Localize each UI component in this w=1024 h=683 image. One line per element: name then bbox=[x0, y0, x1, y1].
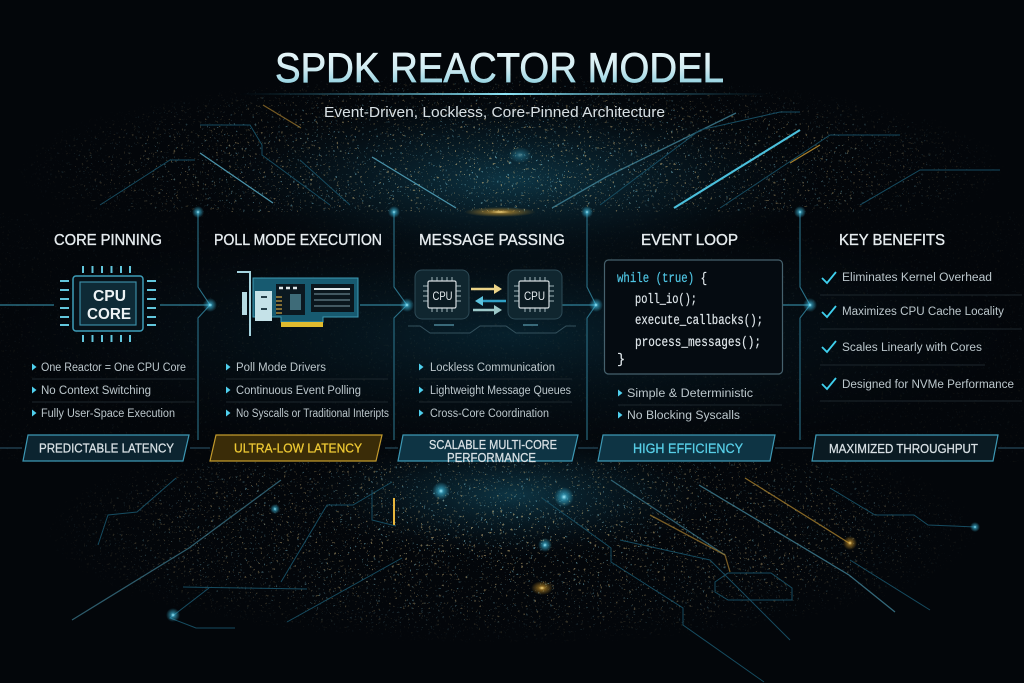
icon: network adapter card bbox=[237, 272, 358, 336]
bullet list: message passing: Cross-Core Coordination bbox=[430, 408, 549, 420]
panel: event loop bbox=[598, 232, 782, 461]
badge: high efficiency: HIGH EFFICIENCY bbox=[633, 441, 743, 456]
icon: CPU core chip: CORE bbox=[87, 306, 131, 323]
badge: ultra-low latency: ULTRA-LOW LATENCY bbox=[234, 442, 363, 456]
badge: ultra-low latency bbox=[210, 435, 382, 461]
bullet list: event loop bbox=[618, 388, 782, 422]
bullet list: poll mode execution bbox=[226, 362, 389, 420]
badge: maximized throughput bbox=[812, 435, 998, 461]
code block: event loop: } bbox=[617, 353, 625, 368]
panel: key benefits bbox=[812, 232, 1022, 461]
bullet list: message passing bbox=[419, 362, 572, 420]
badge: scalable multi-core performance: PERFORMANCE bbox=[447, 451, 536, 465]
heading: poll mode execution: POLL MODE EXECUTION bbox=[214, 232, 382, 249]
heading: message passing: MESSAGE PASSING bbox=[419, 232, 565, 249]
bullet list: message passing: Lightweight Message Queues bbox=[430, 385, 571, 397]
checklist: key benefits: Scales Linearly with Cores bbox=[842, 342, 982, 354]
icon: CPU core chip: CPU bbox=[93, 288, 126, 305]
subtitle: Event-Driven, Lockless, Core-Pinned Architecture bbox=[324, 104, 665, 121]
icon: CPU core chip bbox=[60, 266, 156, 342]
bullet list: poll mode execution: No Syscalls or Traditional Interipts bbox=[236, 408, 389, 420]
badge: predictable latency bbox=[23, 435, 189, 461]
code block: event loop: while (true) { bbox=[617, 272, 707, 287]
badge: high efficiency bbox=[598, 435, 775, 461]
bullet list: core pinning: One Reactor = One CPU Core bbox=[41, 362, 186, 374]
bullet list: core pinning: Fully User-Space Execution bbox=[41, 408, 175, 420]
panel: core pinning bbox=[23, 232, 195, 461]
bullet list: message passing: Lockless Communication bbox=[430, 362, 555, 374]
bullet list: core pinning bbox=[32, 362, 195, 420]
checklist: key benefits bbox=[820, 272, 1022, 401]
code block: event loop: poll_io(); bbox=[635, 293, 697, 308]
badge: maximized throughput: MAXIMIZED THROUGHPUT bbox=[829, 442, 978, 456]
panel: poll mode execution bbox=[210, 232, 389, 461]
code block: event loop bbox=[604, 260, 782, 374]
code block: event loop: process_messages(); bbox=[635, 336, 761, 351]
bullet list: core pinning: No Context Switching bbox=[41, 385, 151, 397]
badge: predictable latency: PREDICTABLE LATENCY bbox=[39, 442, 175, 456]
heading: event loop: EVENT LOOP bbox=[641, 232, 738, 249]
title: SPDK REACTOR MODEL bbox=[275, 44, 724, 91]
checklist: key benefits: Eliminates Kernel Overhead bbox=[842, 272, 992, 284]
title underline rule bbox=[240, 93, 770, 95]
checklist: key benefits: Designed for NVMe Performance bbox=[842, 379, 1014, 391]
heading: key benefits: KEY BENEFITS bbox=[839, 232, 945, 249]
code block: event loop: execute_callbacks(); bbox=[635, 314, 763, 329]
heading: core pinning: CORE PINNING bbox=[54, 232, 162, 249]
bullet list: event loop: Simple & Deterministic bbox=[627, 388, 753, 400]
badge: scalable multi-core performance: SCALABLE MULTI-CORE bbox=[429, 438, 557, 452]
panel: message passing bbox=[398, 232, 578, 465]
diagram: CPU to CPU message exchange: CPU bbox=[432, 289, 452, 303]
badge: scalable multi-core performance bbox=[398, 435, 578, 465]
checklist: key benefits: Maximizes CPU Cache Locality bbox=[842, 306, 1004, 318]
bullet list: poll mode execution: Poll Mode Drivers bbox=[236, 362, 326, 374]
bullet list: event loop: No Blocking Syscalls bbox=[627, 410, 740, 422]
framework: connecting lines bbox=[0, 206, 1024, 448]
diagram: CPU to CPU message exchange: CPU bbox=[524, 289, 545, 303]
bullet list: poll mode execution: Continuous Event Polling bbox=[236, 385, 361, 397]
diagram: CPU to CPU message exchange bbox=[408, 270, 576, 333]
